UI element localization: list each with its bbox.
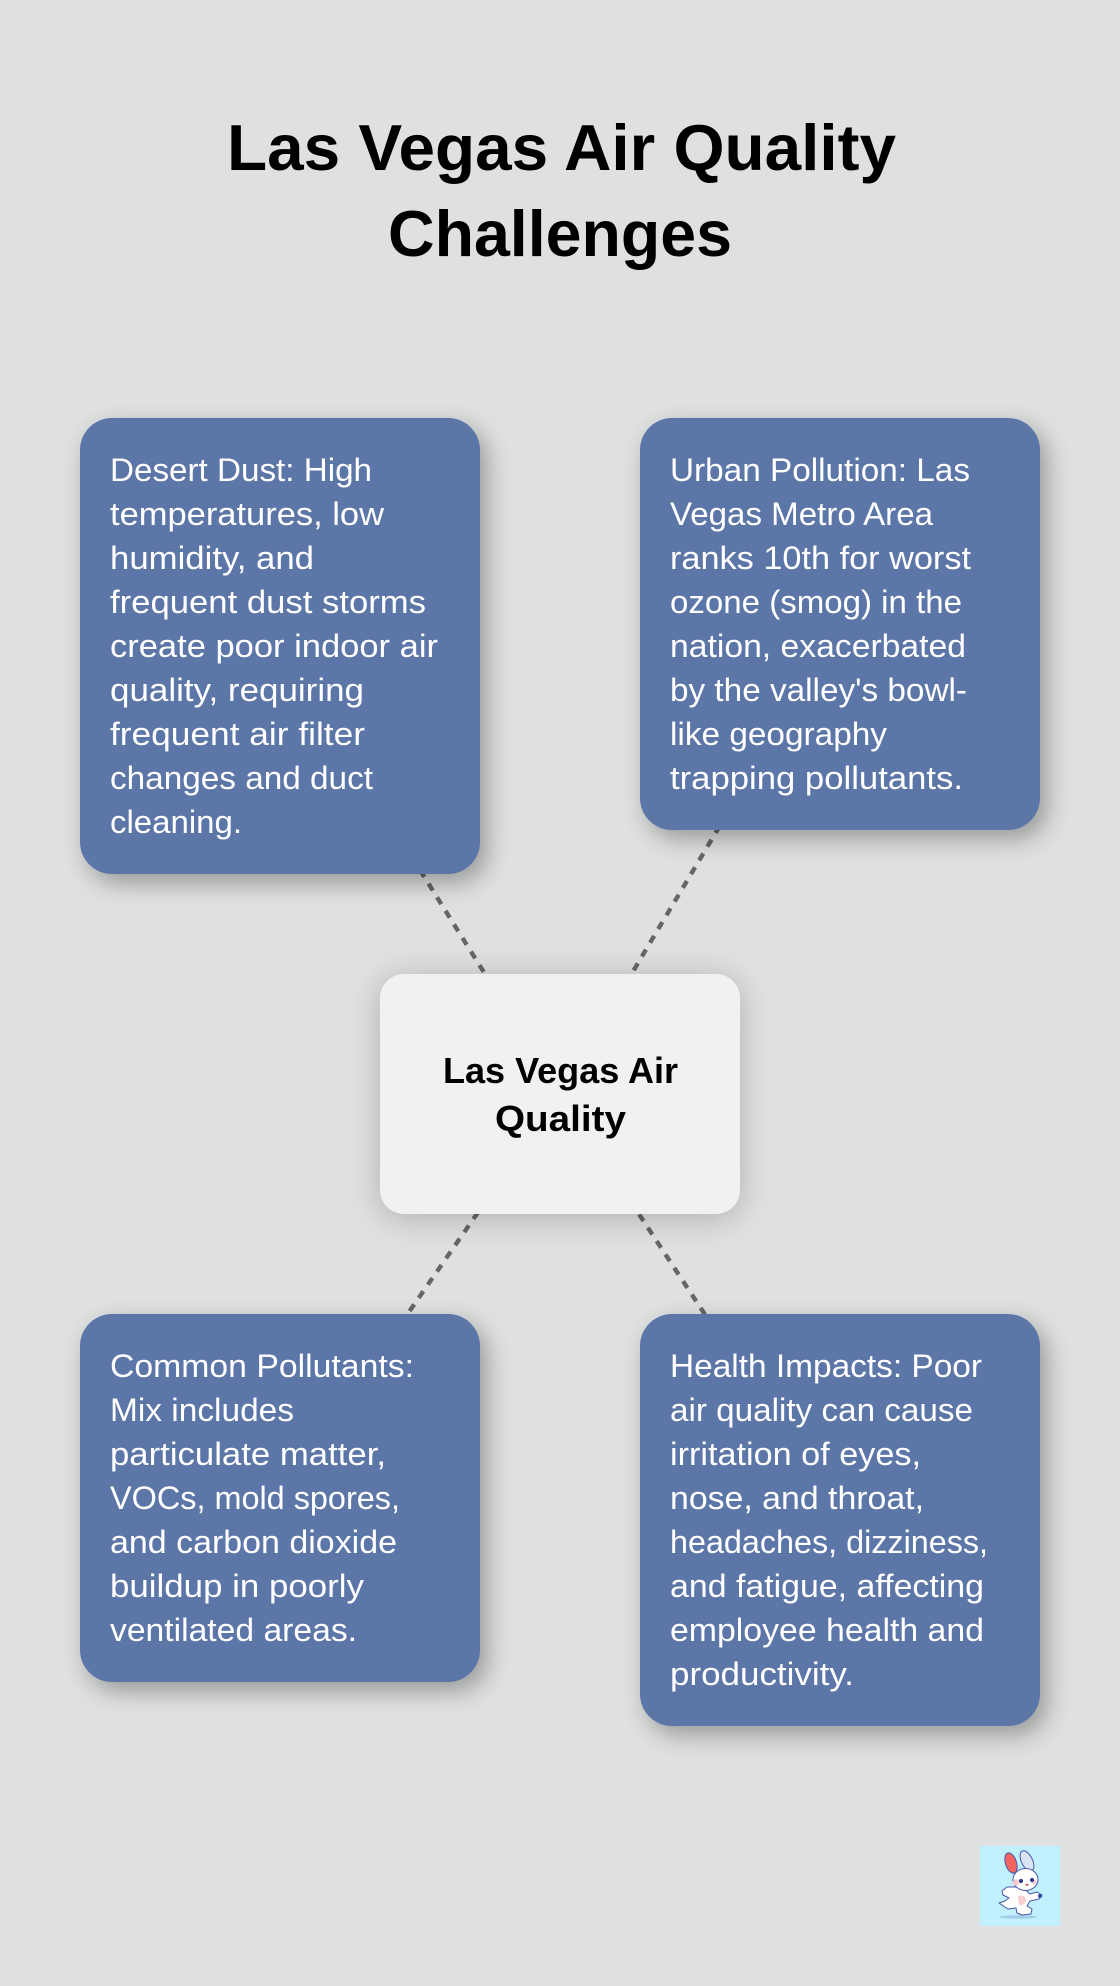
title: Challenges: [388, 197, 732, 270]
panel: Desert Dust: quality, requiring: [110, 672, 364, 708]
panel: Health Impacts: headaches, dizziness,: [670, 1524, 988, 1560]
panel: Desert Dust: [80, 418, 480, 874]
panel: Urban Pollution: trapping pollutants.: [670, 760, 963, 796]
panel: Desert Dust: humidity, and: [110, 540, 314, 576]
panel: Desert Dust: Desert Dust: High: [110, 452, 372, 488]
panel: Health Impacts: Health Impacts: Poor: [670, 1348, 982, 1384]
panel: Urban Pollution: like geography: [670, 716, 888, 752]
panel: Common Pollutants: Mix includes: [110, 1392, 294, 1428]
panel: Common Pollutants: ventilated areas.: [110, 1612, 357, 1648]
panel: Common Pollutants: and carbon dioxide: [110, 1524, 397, 1560]
panel: Health Impacts: nose, and throat,: [670, 1480, 924, 1516]
panel: Common Pollutants: buildup in poorly: [110, 1568, 365, 1604]
title: Las Vegas Air Quality: [227, 111, 896, 184]
panel: Health Impacts: [640, 1314, 1040, 1726]
center node: [380, 974, 740, 1214]
panel: Common Pollutants: VOCs, mold spores,: [110, 1480, 400, 1516]
panel: Health Impacts: and fatigue, affecting: [670, 1568, 984, 1604]
panel: Health Impacts: employee health and: [670, 1612, 984, 1648]
panel: Desert Dust: frequent air filter: [110, 716, 365, 752]
panel: Urban Pollution: ranks 10th for worst: [670, 540, 971, 576]
panel: Urban Pollution: nation, exacerbated: [670, 628, 966, 664]
title: [227, 111, 896, 270]
panel: Health Impacts: air quality can cause: [670, 1392, 973, 1428]
panel: Common Pollutants: Common Pollutants:: [110, 1348, 414, 1384]
panel: Common Pollutants: [80, 1314, 480, 1682]
panel: Urban Pollution: by the valley's bowl-: [670, 672, 967, 708]
center node: Quality: [495, 1098, 626, 1139]
panel: Urban Pollution: ozone (smog) in the: [670, 584, 962, 620]
center node: Las Vegas Air: [443, 1050, 678, 1091]
panel: Desert Dust: changes and duct: [110, 760, 373, 796]
panel: Urban Pollution: [640, 418, 1040, 830]
panel: Desert Dust: cleaning.: [110, 804, 242, 840]
panel: Desert Dust: temperatures, low: [110, 496, 385, 532]
panel: Urban Pollution: Urban Pollution: Las: [670, 452, 970, 488]
panel: Desert Dust: create poor indoor air: [110, 628, 438, 664]
panel: Desert Dust: frequent dust storms: [110, 584, 426, 620]
panel: Urban Pollution: Vegas Metro Area: [670, 496, 934, 532]
panel: Health Impacts: irritation of eyes,: [670, 1436, 921, 1472]
panel: Common Pollutants: particulate matter,: [110, 1436, 386, 1472]
icon: rabbit logo: [980, 1846, 1060, 1926]
panel: Health Impacts: productivity.: [670, 1656, 854, 1692]
